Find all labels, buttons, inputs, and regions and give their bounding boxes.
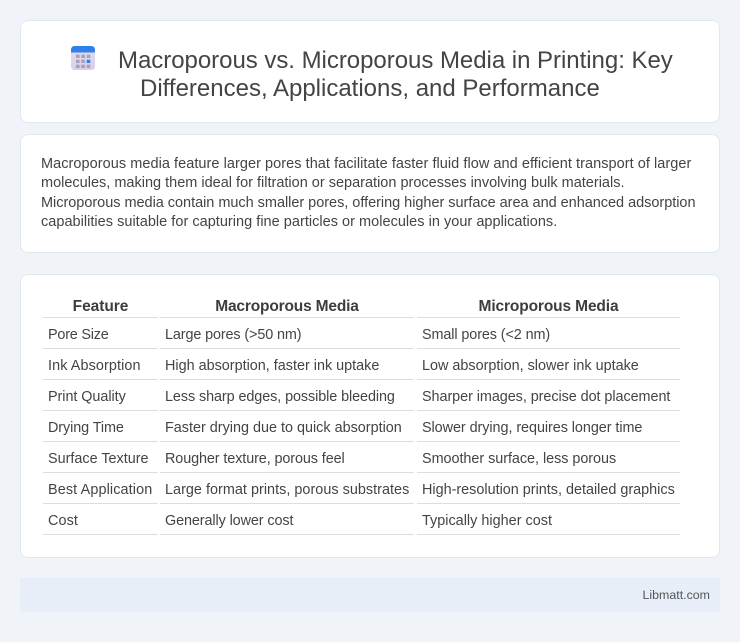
comparison table: Macroporous Media bbox=[215, 298, 359, 315]
comparison table: Large format prints, porous substrates bbox=[165, 482, 409, 498]
intro text: Macroporous media feature larger pores that facilitate faster fluid flow and efficient transport of larger bbox=[41, 156, 691, 172]
intro text: capabilities suitable for capturing fine particles or molecules in your applications. bbox=[41, 214, 557, 230]
comparison table: Ink Absorption bbox=[48, 358, 141, 374]
footer text: Libmatt.com: Libmatt.com bbox=[643, 588, 710, 602]
comparison table: Drying Time bbox=[48, 420, 124, 436]
comparison table: Feature bbox=[73, 298, 128, 315]
comparison table: High absorption, faster ink uptake bbox=[165, 358, 379, 374]
comparison table: Low absorption, slower ink uptake bbox=[422, 358, 639, 374]
comparison table: Less sharp edges, possible bleeding bbox=[165, 389, 395, 405]
panel: intro card bbox=[20, 134, 720, 253]
comparison table: High-resolution prints, detailed graphics bbox=[422, 482, 675, 498]
comparison table: Pore Size bbox=[48, 327, 109, 343]
comparison table: Faster drying due to quick absorption bbox=[165, 420, 402, 436]
comparison table: Rougher texture, porous feel bbox=[165, 451, 345, 467]
title: Differences, Applications, and Performance bbox=[140, 75, 600, 102]
panel: table card bbox=[20, 274, 720, 558]
intro text bbox=[41, 156, 696, 230]
comparison table: Print Quality bbox=[48, 389, 126, 405]
comparison table: Small pores (<2 nm) bbox=[422, 327, 550, 343]
comparison table: Slower drying, requires longer time bbox=[422, 420, 642, 436]
comparison table: Smoother surface, less porous bbox=[422, 451, 616, 467]
title: Macroporous vs. Microporous Media in Printing: Key bbox=[118, 47, 673, 74]
panel: header card bbox=[20, 20, 720, 123]
comparison table: Generally lower cost bbox=[165, 513, 293, 529]
footer bar bbox=[20, 578, 720, 612]
comparison table: Cost bbox=[48, 513, 78, 529]
comparison table: Sharper images, precise dot placement bbox=[422, 389, 670, 405]
intro text: molecules, making them ideal for filtration or separation processes involving bulk materials. bbox=[41, 175, 624, 191]
comparison table bbox=[43, 298, 680, 535]
comparison table: Microporous Media bbox=[479, 298, 618, 315]
comparison table: Typically higher cost bbox=[422, 513, 552, 529]
comparison table: Best Application bbox=[48, 482, 152, 498]
intro text: Microporous media contain much smaller pores, offering higher surface area and enhanced adsorption bbox=[41, 195, 696, 211]
comparison table: Surface Texture bbox=[48, 451, 149, 467]
comparison table: Large pores (>50 nm) bbox=[165, 327, 301, 343]
title bbox=[118, 47, 673, 102]
icon: calendar grid bbox=[71, 46, 95, 70]
